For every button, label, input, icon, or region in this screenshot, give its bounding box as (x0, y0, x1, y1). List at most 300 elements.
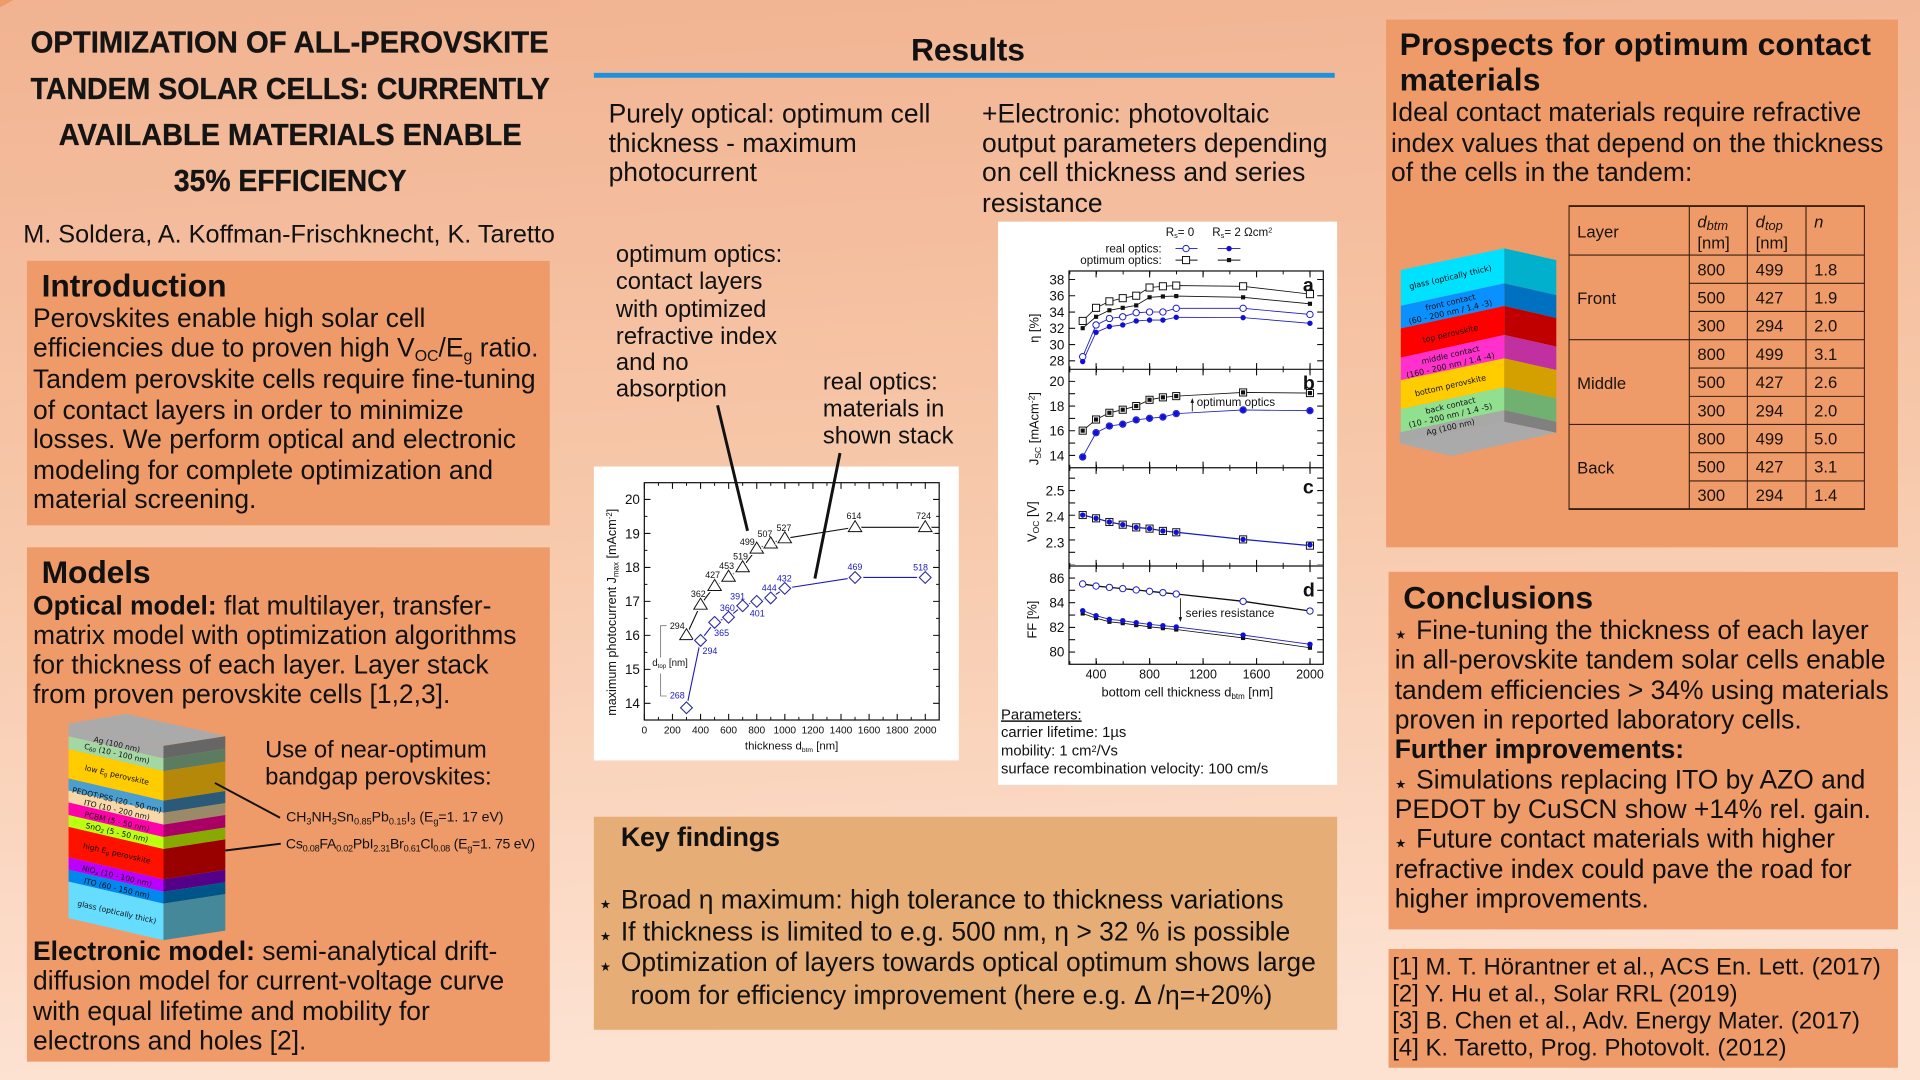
text: perovskite formulas: NH (311, 809, 332, 825)
series: optimum optics: 519 (733, 552, 748, 562)
text: perovskite formulas: =1. 75 eV) (472, 836, 535, 852)
series: real optics: 360 (720, 603, 735, 613)
x axis labels: 2000 (914, 725, 937, 736)
y axis labels: 18 (1049, 399, 1064, 414)
table: optimum refractive indices: 300 (1697, 486, 1725, 505)
diagram: tandem cell layer stack: glass (optically thick) (77, 899, 157, 926)
diagram: tandem cell layer stack (69, 714, 225, 940)
list: findings: Broad η maximum: high tolerance to thickness variations (621, 885, 1284, 915)
panel: key findings (594, 817, 1337, 1030)
axis titles (1025, 314, 1273, 701)
text: perovskite formulas: Pb (372, 809, 389, 825)
diagram: tandem cell layer stack: Ag (100 nm) (93, 735, 141, 754)
text: perovskite formulas: FA (319, 836, 337, 852)
series: optimum optics (670, 511, 939, 640)
panel: conclusions (1389, 572, 1898, 929)
series: real optics: 518 (913, 562, 928, 572)
diagram: contact layer stack (1400, 248, 1556, 456)
text: electronic: +Electronic: photovoltaic (982, 98, 1269, 128)
text: conclusions body: Future contact materials with higher (1416, 823, 1835, 853)
y axis labels: 2.5 (1046, 484, 1064, 499)
annotation: optimum optics: optimum optics: (616, 241, 782, 268)
table: optimum refractive indices: 499 (1756, 345, 1783, 364)
text: prospects body (1391, 97, 1883, 187)
text: conclusions body: ★ (1395, 836, 1406, 850)
text: perovskite formulas (286, 809, 535, 854)
diagram: tandem cell layer stack: (5 - 50 nm) (103, 825, 149, 844)
text: introduction body: efficiencies due to proven high V (33, 332, 415, 362)
y axis labels (1046, 272, 1065, 660)
text: perovskite formulas: I (407, 809, 410, 825)
text: purely optical (609, 98, 930, 187)
text: parameters: mobility: 1 cm (1001, 744, 1091, 760)
legend: = 0 (1178, 226, 1195, 239)
text: perovskite formulas: 3 (410, 817, 416, 827)
annotation: optimum optics: refractive index (616, 323, 777, 350)
text: introduction body: OC (415, 348, 439, 365)
y axis labels: 16 (625, 628, 640, 643)
legend: real optics: (1105, 243, 1162, 256)
annotation: optimum optics: contact layers (616, 268, 763, 295)
x axis labels: 1600 (858, 725, 881, 736)
text: optical model: matrix model with optimization algorithms (33, 620, 516, 650)
x axis labels (1086, 667, 1324, 681)
series: optimum optics: 507 (757, 529, 772, 539)
x axis labels: 800 (1139, 667, 1160, 681)
heading: key findings: Key findings (621, 822, 780, 852)
table: optimum refractive indices: 800 (1697, 345, 1725, 364)
dtop label and bracket: top (658, 663, 667, 670)
series: real optics: 365 (714, 628, 729, 638)
text: perovskite formulas: g (433, 817, 438, 827)
text: perovskite formulas: =1. 17 eV) (438, 809, 504, 825)
text: perovskite formulas: CH (286, 809, 306, 825)
annotation: real optics: shown stack (823, 422, 954, 449)
y axis labels: 20 (1049, 374, 1064, 389)
plot c: open-circuit voltage (1079, 511, 1314, 549)
diagram: tandem cell layer stack: 60 (88, 747, 97, 755)
legend: R (1166, 226, 1174, 239)
y axis labels: 38 (1049, 272, 1064, 287)
text: conclusions body: tandem efficiencies > 34% using materials (1395, 675, 1889, 705)
diagram: contact layer stack: (160 - 200 nm / 1.4 -4) (1405, 351, 1496, 380)
series: optimum optics: 527 (776, 523, 791, 533)
text: perovskite formulas: 3 (332, 817, 337, 827)
table: optimum refractive indices: 500 (1697, 289, 1725, 308)
diagram: tandem cell layer stack: SnO (85, 821, 102, 833)
diagram: tandem cell layer stack: high E (82, 841, 107, 855)
y axis labels: 80 (1049, 645, 1064, 660)
x axis labels: 1600 (1243, 667, 1270, 681)
x axis labels: 600 (720, 725, 737, 736)
diagram: contact layer stack: bottom perovskite (1414, 373, 1487, 398)
y axis title: maximum photocurrent J (605, 577, 619, 716)
list: findings: If thickness is limited to e.g. 500 nm, η > 32 % is possible (621, 916, 1290, 946)
annotation: optimum optics arrow: optimum optics (1197, 396, 1275, 409)
text: parameters: Parameters: (1001, 707, 1082, 723)
table: optimum refractive indices: btm (1707, 218, 1728, 233)
table: optimum refractive indices: 499 (1756, 429, 1783, 448)
table: optimum refractive indices: 1.9 (1814, 289, 1837, 308)
table: optimum refractive indices: 499 (1756, 260, 1783, 279)
list: findings: ★ (600, 898, 611, 912)
text: introduction body: modeling for complete optimization and (33, 455, 493, 485)
arrow: high bandgap pointer (225, 844, 281, 851)
diagram: tandem cell layer stack: NiO (81, 864, 96, 876)
y axis labels: 36 (1049, 289, 1064, 304)
text: perovskite formulas: 0.08 (433, 844, 450, 854)
diagram: contact layer stack: (60 - 200 nm / 1.4 -3) (1408, 298, 1493, 326)
text: perovskite formulas: 0.02 (336, 844, 353, 854)
series: real optics: 469 (847, 562, 862, 572)
x axis labels: 400 (1086, 667, 1107, 681)
x axis labels: 400 (692, 725, 709, 736)
text: perovskite formulas: (E (450, 836, 467, 852)
table: optimum refractive indices: [nm] (1697, 233, 1730, 252)
table: optimum refractive indices: 294 (1756, 401, 1783, 420)
table: optimum refractive indices: 3.1 (1814, 345, 1837, 364)
text: introduction body: Perovskites enable high solar cell (33, 303, 425, 333)
y axis labels: 86 (1049, 571, 1064, 586)
x axis labels: 1000 (773, 725, 796, 736)
table: optimum refractive indices: 500 (1697, 458, 1725, 477)
series: real optics: 432 (777, 573, 792, 583)
table: optimum refractive indices: 427 (1756, 373, 1783, 392)
y axis labels: 18 (625, 560, 640, 575)
panel letters (1303, 274, 1315, 601)
y axis labels: 32 (1049, 321, 1064, 336)
axis titles: [nm] (1245, 685, 1273, 700)
diagram: tandem cell layer stack: g (103, 772, 108, 779)
diagram: tandem cell layer stack: low E (84, 763, 106, 777)
title: OPTIMIZATION OF ALL-PEROVSKITE (31, 26, 549, 60)
text: perovskite formulas: Cl (420, 836, 433, 852)
y axis title: [mAcm (605, 519, 619, 562)
diagram: contact layer stack: (10 - 200 nm / 1.4 -5) (1408, 402, 1493, 430)
axis titles: bottom cell thickness d (1102, 685, 1231, 700)
table: optimum refractive indices: 3.1 (1814, 458, 1837, 477)
annotation: optimum optics: with optimized (615, 296, 766, 323)
table: optimum refractive indices: n (1814, 212, 1823, 231)
text: perovskite formulas: Br (390, 836, 404, 852)
text: perovskite formulas: 0.08 (303, 844, 320, 854)
text: near-optimum bandgap: Use of near-optimum (265, 737, 487, 764)
panel letters: c (1303, 476, 1314, 498)
panel: introduction (27, 261, 550, 525)
panel: references: [1] M. T. Hörantner et al., ACS En. Lett. (2017) (1392, 954, 1881, 981)
panel: references: [3] B. Chen et al., Adv. Energy Mater. (2017) (1392, 1008, 1860, 1035)
text: introduction body: losses. We perform optical and electronic (33, 424, 516, 454)
table: optimum refractive indices: 300 (1697, 401, 1725, 420)
text: perovskite formulas: Cs (286, 836, 303, 852)
text: electronic: output parameters depending (982, 128, 1327, 158)
list: findings (600, 885, 1316, 1010)
table: optimum refractive indices: 800 (1697, 429, 1725, 448)
text: prospects body: of the cells in the tandem: (1391, 157, 1692, 187)
text: conclusions body: Fine-tuning the thickness of each layer (1416, 615, 1869, 645)
text: optical model: Optical model: flat multilayer, transfer- (33, 591, 491, 621)
y axis labels: 34 (1049, 305, 1065, 320)
diagram: tandem cell layer stack: x (94, 871, 99, 878)
x axis title: [nm] (813, 740, 838, 752)
legend: R (1212, 226, 1221, 239)
diagram: tandem cell layer stack: C (83, 742, 90, 752)
table: optimum refractive indices: 1.4 (1814, 486, 1837, 505)
text: parameters: /Vs (1097, 744, 1118, 760)
diagram: tandem cell layer stack: g (105, 851, 110, 857)
text: prospects body: index values that depend on the thickness (1391, 128, 1883, 158)
table: optimum refractive indices: 500 (1697, 373, 1725, 392)
x axis labels: 1800 (886, 725, 909, 736)
diagram: tandem cell layer stack: perovskite (107, 769, 150, 787)
series: real optics: 444 (762, 583, 777, 593)
text: conclusions body: PEDOT by CuSCN show +14% rel. gain. (1395, 794, 1871, 824)
diagram: tandem cell layer stack: ITO (60 - 150 nm) (83, 876, 151, 900)
text: conclusions body: ★ (1395, 628, 1406, 642)
y axis labels: 30 (1049, 337, 1064, 352)
heading: prospects: Prospects for optimum contact (1400, 26, 1871, 62)
y axis labels: 19 (625, 526, 640, 541)
annotation: optimum optics (615, 241, 782, 403)
text: optical model (33, 591, 516, 709)
text: optical model: for thickness of each layer. Layer stack (33, 649, 489, 679)
text: conclusions body: higher improvements. (1395, 883, 1649, 913)
x axis labels: 1400 (830, 725, 853, 736)
text: perovskite formulas: 3 (306, 817, 312, 827)
x axis labels: 1200 (1189, 667, 1217, 681)
series: optimum optics: 614 (847, 511, 861, 521)
legend: optimum optics: (1080, 254, 1162, 267)
y axis title: ] (605, 509, 619, 512)
series: optimum optics: 499 (740, 537, 755, 547)
table: optimum refractive indices: 1.8 (1814, 260, 1837, 279)
authors: M. Soldera, A. Koffman-Frischknecht, K. Taretto (23, 220, 555, 248)
heading: prospects (1400, 26, 1871, 98)
plot b: short-circuit current (1079, 389, 1314, 460)
series: optimum optics: 724 (916, 511, 931, 521)
panel letters: b (1303, 372, 1315, 394)
table: optimum refractive indices: [nm] (1756, 233, 1788, 252)
title (31, 26, 550, 198)
diagram: tandem cell layer stack: PCBM (5 - 50 nm) (83, 810, 150, 834)
diagram: contact layer stack: front contact (1425, 292, 1476, 313)
y axis labels: 16 (1049, 424, 1064, 439)
table: optimum refractive indices: 427 (1756, 458, 1783, 477)
list: findings: Optimization of layers towards optical optimum shows large (621, 947, 1316, 977)
text: electronic: resistance (982, 188, 1103, 218)
y axis labels: 14 (625, 696, 640, 711)
axis titles: btm (1231, 692, 1245, 701)
series: real optics (670, 562, 931, 714)
series: optimum optics: 427 (705, 570, 720, 580)
text: near-optimum bandgap (265, 737, 492, 791)
table: optimum refractive indices: 427 (1756, 289, 1783, 308)
series: real optics: 391 (730, 591, 745, 601)
results rule (594, 73, 1335, 78)
text: purely optical: Purely optical: optimum cell (609, 98, 930, 128)
table: optimum refractive indices: 800 (1697, 260, 1725, 279)
chart: photovoltaic parameters (998, 222, 1337, 785)
list: findings: ★ (600, 960, 611, 974)
text: conclusions body (1395, 615, 1889, 913)
diagram: tandem cell layer stack: (10 - 100 nm) (95, 745, 151, 766)
text: introduction body: of contact layers in order to minimize (33, 395, 464, 425)
diagram: contact layer stack: Ag (100 nm) (1425, 417, 1476, 437)
text: optical model: from proven perovskite cells [1,2,3]. (33, 679, 450, 709)
table: optimum refractive indices: top (1765, 218, 1783, 233)
table: optimum refractive indices: Front (1577, 289, 1616, 308)
diagram: contact layer stack: top perovskite (1422, 323, 1479, 345)
text: perovskite formulas: PbI (353, 836, 374, 852)
axis titles: -2 (1027, 395, 1037, 403)
text: perovskite formulas: Sn (337, 809, 354, 825)
axis titles: [V] (1025, 501, 1040, 521)
heading: prospects: materials (1400, 62, 1540, 98)
text: conclusions body: proven in reported laboratory cells. (1395, 705, 1802, 735)
table: optimum refractive indices: 2.0 (1814, 401, 1837, 420)
legend: 2 (1268, 225, 1272, 234)
text: purely optical: photocurrent (609, 157, 758, 187)
axis titles: ] (1026, 392, 1041, 396)
plot a: efficiency (1079, 282, 1314, 364)
y axis labels: 20 (625, 492, 640, 507)
text: electronic model: diffusion model for current-voltage curve (33, 965, 504, 995)
list: findings: ★ (600, 929, 611, 943)
text: electronic model: with equal lifetime and mobility for (32, 996, 430, 1026)
text: conclusions body: Further improvements: (1395, 734, 1684, 764)
text: introduction body: Tandem perovskite cells require fine-tuning (33, 364, 536, 394)
dtop label and bracket: [nm] (666, 658, 688, 669)
series: optimum optics: 362 (691, 589, 706, 599)
dtop label and bracket (652, 626, 688, 696)
diagram: contact layer stack: back contact (1425, 396, 1476, 416)
legend: s (1221, 231, 1225, 240)
panel: references (1389, 949, 1898, 1068)
title: AVAILABLE MATERIALS ENABLE (59, 118, 522, 152)
diagram: tandem cell layer stack: ITO (10 - 200 nm) (83, 798, 151, 822)
text: near-optimum bandgap: bandgap perovskites: (265, 764, 492, 791)
text: parameters: carrier lifetime: 1µs (1001, 725, 1126, 741)
text: introduction body: material screening. (33, 484, 256, 514)
text: electronic model: Electronic model: semi-analytical drift- (33, 936, 497, 966)
table: optimum refractive indices: 5.0 (1814, 429, 1837, 448)
axis titles: [mAcm (1026, 403, 1041, 447)
y axis labels: 14 (1049, 448, 1065, 463)
annotation: series resistance arrow (1179, 598, 1274, 622)
annotation: real optics: real optics: (823, 368, 938, 395)
table: optimum refractive indices: 294 (1756, 317, 1783, 336)
diagram: contact layer stack: middle contact (1421, 344, 1480, 366)
series: optimum optics: 294 (670, 621, 685, 631)
y axis labels: 15 (625, 662, 640, 677)
annotation: series resistance arrow: series resistance (1186, 607, 1274, 620)
text: conclusions body: in all-perovskite tandem solar cells enable (1395, 645, 1886, 675)
text: conclusions body: Simulations replacing ITO by AZO and (1416, 765, 1865, 795)
text: electronic (982, 98, 1327, 218)
axis titles: FF [%] (1025, 601, 1040, 639)
title: TANDEM SOLAR CELLS: CURRENTLY (31, 72, 550, 106)
text: introduction body (33, 303, 539, 514)
table: optimum refractive indices: Layer (1577, 223, 1619, 242)
x axis labels: 1200 (802, 725, 824, 736)
annotation: real optics: materials in (823, 395, 944, 422)
series: real optics: 401 (750, 608, 765, 618)
y axis labels: 84 (1049, 595, 1065, 610)
y axis title: -2 (605, 512, 614, 519)
text: parameters: surface recombination velocity: 100 cm/s (1001, 761, 1268, 777)
arrow: to optimum optics curve (718, 405, 748, 531)
y axis labels: 17 (625, 594, 640, 609)
diagram: tandem cell layer stack: 2 (100, 829, 104, 835)
diagram: tandem cell layer stack: perovskite (109, 847, 152, 866)
table: optimum refractive indices: 2.0 (1814, 317, 1837, 336)
x axis title: btm (802, 747, 813, 754)
legend: s (1174, 231, 1178, 240)
text: introduction body: g (464, 348, 472, 365)
x axis labels: 200 (664, 725, 681, 736)
x axis labels (641, 725, 937, 736)
axis titles: SC (1033, 447, 1043, 459)
text: parameters (1001, 707, 1268, 777)
y axis labels: 2.4 (1046, 510, 1065, 525)
x axis labels: 2000 (1296, 667, 1324, 681)
diagram: tandem cell layer stack: (10 - 100 nm) (98, 868, 153, 889)
text: conclusions body: refractive index could pave the road for (1395, 854, 1852, 884)
x axis labels: 800 (748, 725, 766, 736)
text: introduction body: ratio. (472, 332, 539, 362)
text: perovskite formulas: 0.61 (404, 844, 421, 854)
table: optimum refractive indices: 2.6 (1814, 373, 1837, 392)
axis titles: η [%] (1026, 314, 1041, 343)
series: real optics: 294 (703, 646, 717, 656)
panel letters: d (1303, 579, 1315, 601)
axis titles: J (1026, 459, 1041, 465)
table: optimum refractive indices: d (1697, 212, 1707, 231)
text: introduction body: /E (439, 332, 464, 362)
axis titles: V (1025, 533, 1040, 542)
text: parameters: 2 (1091, 744, 1097, 754)
y axis labels (625, 492, 640, 711)
legend (1080, 225, 1272, 267)
text: electronic model (32, 936, 504, 1055)
table: optimum refractive indices: 294 (1756, 486, 1783, 505)
text: perovskite formulas: g (467, 844, 472, 854)
arrow: to real optics curve (815, 453, 840, 579)
table: optimum refractive indices: Back (1577, 459, 1615, 478)
panel: prospects (1386, 20, 1898, 547)
table: optimum refractive indices: d (1756, 212, 1765, 231)
text: purely optical: thickness - maximum (609, 128, 857, 158)
chart: maximum photocurrent vs thickness (594, 467, 959, 760)
plot d: fill factor (1080, 581, 1313, 650)
heading: models: Models (42, 554, 151, 590)
text: perovskite formulas: 2.31 (373, 844, 390, 854)
title: 35% EFFICIENCY (174, 164, 407, 198)
legend: = 2 Ωcm (1224, 226, 1268, 239)
text: conclusions body: ★ (1395, 778, 1406, 792)
dtop label and bracket: d (652, 658, 658, 669)
text: perovskite formulas: 0.15 (389, 817, 407, 827)
table: optimum refractive indices: 300 (1697, 317, 1725, 336)
text: perovskite formulas: (E (415, 809, 433, 825)
heading: introduction: Introduction (42, 267, 227, 303)
panel letters: a (1303, 274, 1315, 296)
heading: conclusions: Conclusions (1403, 580, 1593, 616)
table: optimum refractive indices (1569, 206, 1865, 509)
x axis title: thickness d (745, 740, 802, 752)
series: optimum optics: 453 (719, 561, 734, 571)
text: electronic: on cell thickness and series (982, 157, 1305, 187)
